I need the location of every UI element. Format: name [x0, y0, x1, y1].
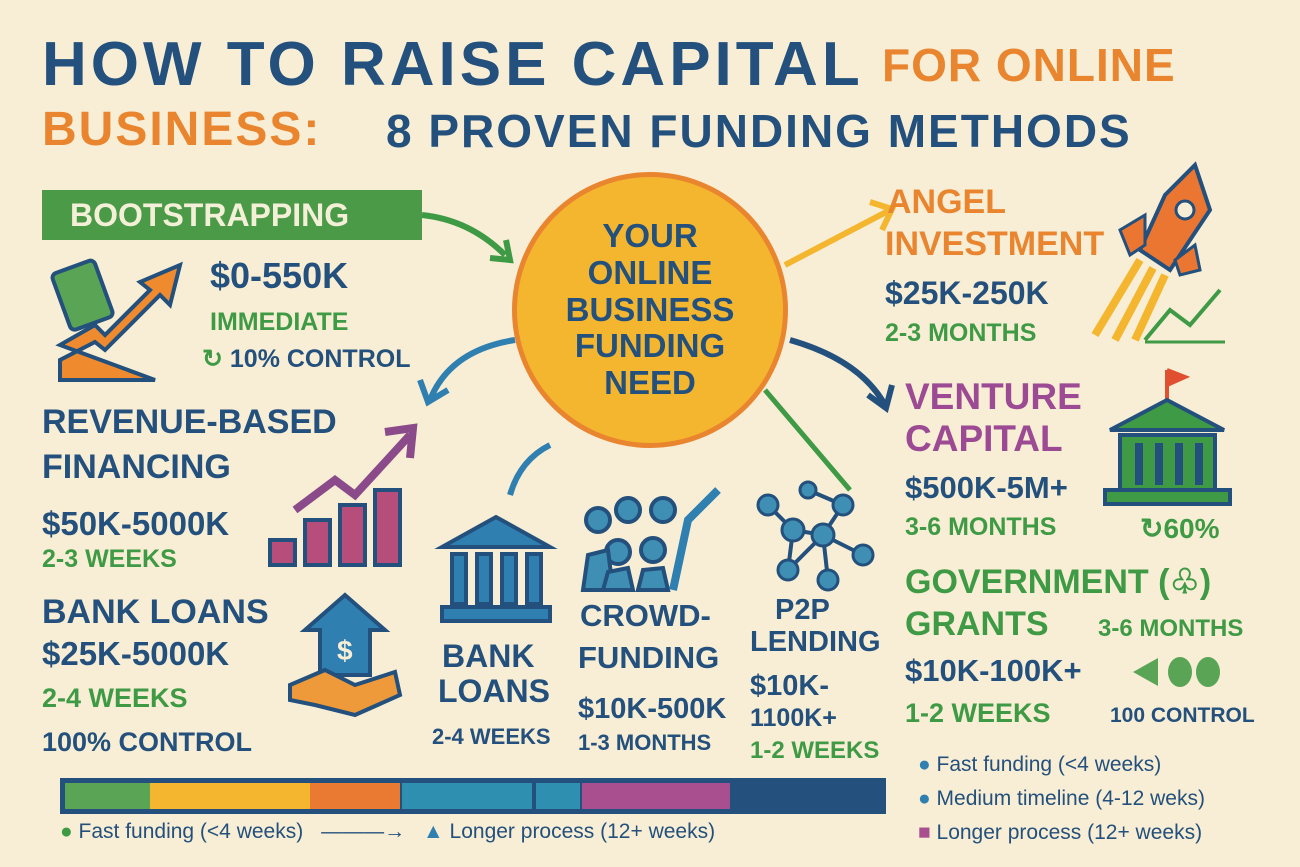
text: p2p lending: 1-2 WEEKS — [750, 737, 879, 764]
text: government grants: $10K-100K+ — [905, 653, 1082, 688]
text: bootstrapping details — [202, 255, 410, 373]
text: crowdfunding: CROWD- — [580, 598, 711, 633]
icon: p2p network — [756, 480, 874, 592]
legend: bottom: ● Fast funding (<4 weeks) ———→ ▲ Longer process (12+ weeks) — [60, 820, 715, 843]
text: bank loans left: 2-4 WEEKS — [42, 683, 188, 713]
icon: bar chart — [268, 423, 418, 567]
text: bootstrapping details: $0-550K — [210, 255, 348, 296]
text: revenue-based financing — [42, 403, 337, 573]
icon: crowd — [580, 487, 721, 592]
legend: right: ■ Longer process (12+ weeks) — [918, 821, 1202, 844]
icon: house handshake: $ — [337, 635, 353, 666]
text: government grants: 100 CONTROL — [1110, 704, 1255, 727]
icon: grant shapes — [1133, 657, 1220, 687]
legend: right — [918, 753, 1205, 844]
center circle: BUSINESS — [566, 291, 734, 328]
text: revenue-based financing: FINANCING — [42, 448, 231, 486]
title: 8 PROVEN FUNDING METHODS — [386, 105, 1132, 157]
text: 60%: ↻60% — [1140, 513, 1220, 544]
text: bootstrapping details: IMMEDIATE — [210, 308, 348, 336]
text: government grants: 3-6 MONTHS — [1098, 615, 1243, 642]
legend: right: ● Fast funding (<4 weeks) — [918, 753, 1161, 776]
icon: rocket — [1092, 161, 1225, 344]
timeline bar — [60, 778, 886, 814]
text: angel investment: 2-3 MONTHS — [885, 319, 1036, 347]
banner: bootstrapping — [42, 190, 422, 240]
text: crowdfunding — [578, 598, 726, 755]
text: venture capital: CAPITAL — [905, 418, 1063, 459]
text: government grants: GRANTS — [905, 605, 1049, 643]
text: government grants: 1-2 WEEKS — [905, 698, 1051, 728]
text: bank loans middle: BANK — [442, 638, 534, 674]
title: HOW TO RAISE CAPITAL — [42, 30, 864, 99]
icon: money and growth arrow — [50, 258, 183, 382]
text: bank loans middle: 2-4 WEEKS — [432, 724, 551, 749]
text: venture capital: VENTURE — [905, 376, 1082, 417]
text: bank loans left — [42, 593, 269, 757]
text: p2p lending — [750, 594, 880, 764]
text: angel investment: ANGEL — [887, 183, 1006, 221]
center circle: ONLINE — [588, 254, 712, 291]
text: p2p lending: 1100K+ — [750, 704, 837, 732]
text: angel investment: INVESTMENT — [885, 225, 1104, 263]
text: bank loans left: $25K-5000K — [42, 635, 229, 672]
text: venture capital: $500K-5M+ — [905, 470, 1068, 505]
text: venture capital: 3-6 MONTHS — [905, 513, 1056, 541]
arrow: bootstrapping to center — [422, 212, 514, 264]
center circle — [512, 172, 788, 448]
title: BUSINESS: — [42, 103, 321, 156]
legend: right: ● Medium timeline (4-12 weks) — [918, 787, 1205, 810]
icon: VC building — [1103, 368, 1232, 506]
text: bank loans middle: LOANS — [438, 673, 550, 709]
text: revenue-based financing: 2-3 WEEKS — [42, 545, 177, 573]
text: government grants — [905, 563, 1255, 728]
text: p2p lending: P2P — [775, 594, 830, 626]
text: crowdfunding: 1-3 MONTHS — [578, 730, 711, 755]
text: bank loans left: BANK LOANS — [42, 593, 269, 631]
text: venture capital — [905, 376, 1082, 541]
text: bank loans middle — [432, 638, 551, 749]
text: revenue-based financing: REVENUE-BASED — [42, 403, 337, 441]
text: government grants: GOVERNMENT (♧) — [905, 563, 1211, 601]
text: revenue-based financing: $50K-5000K — [42, 505, 229, 542]
text: p2p lending: LENDING — [750, 626, 880, 658]
banner: bootstrapping: BOOTSTRAPPING — [70, 197, 349, 233]
title — [42, 30, 1176, 157]
title: FOR ONLINE — [882, 39, 1176, 91]
text: bank loans left: 100% CONTROL — [42, 727, 252, 757]
center circle: FUNDING — [575, 327, 725, 364]
center circle: NEED — [604, 364, 696, 401]
icon: house handshake — [288, 592, 402, 718]
center circle: YOUR — [602, 217, 698, 254]
text: crowdfunding: FUNDING — [578, 640, 719, 675]
text: angel investment — [885, 183, 1104, 347]
text: angel investment: $25K-250K — [885, 275, 1049, 311]
text: p2p lending: $10K- — [750, 670, 829, 702]
text: bootstrapping details: ↻ 10% CONTROL — [202, 345, 410, 373]
arrows from center — [417, 199, 896, 496]
icon: bank building — [434, 514, 558, 623]
text: crowdfunding: $10K-500K — [578, 693, 726, 725]
